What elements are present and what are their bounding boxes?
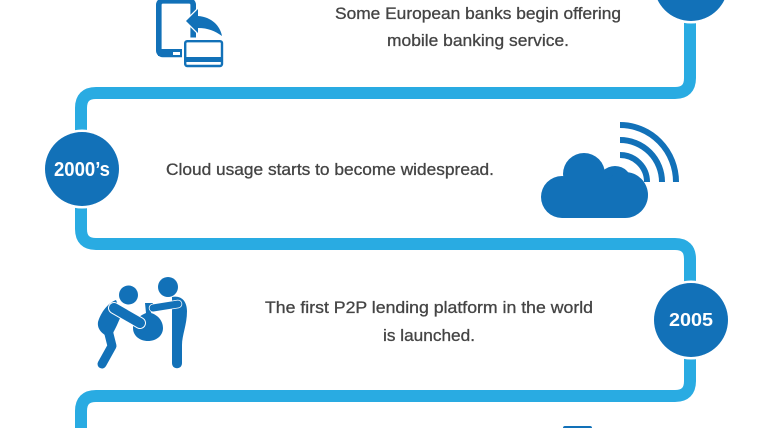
year badge: 2000's: [42, 130, 122, 208]
text: P2P lending: is launched.: [383, 327, 475, 345]
year badge: top circle: [652, 0, 730, 24]
text: mobile banking: mobile banking service.: [387, 32, 569, 50]
year badge: 2000's: 2000’s: [54, 159, 110, 181]
year badge: 2005: [652, 280, 730, 360]
text: mobile banking: [335, 5, 621, 50]
icon: cloud with signal: [541, 125, 676, 218]
icon: partial next icon: [563, 426, 592, 428]
year badge: 2005: 2005: [669, 310, 713, 330]
text: cloud usage: Cloud usage starts to become widespread.: [166, 161, 494, 179]
icon: phone and card: [158, 1, 226, 69]
text: P2P lending: The first P2P lending platform in the world: [265, 299, 593, 317]
icon: two people with money bag: [98, 277, 187, 368]
text: P2P lending: [265, 299, 593, 345]
winding timeline path: [81, 10, 690, 428]
text: mobile banking: Some European banks begin offering: [335, 5, 621, 23]
